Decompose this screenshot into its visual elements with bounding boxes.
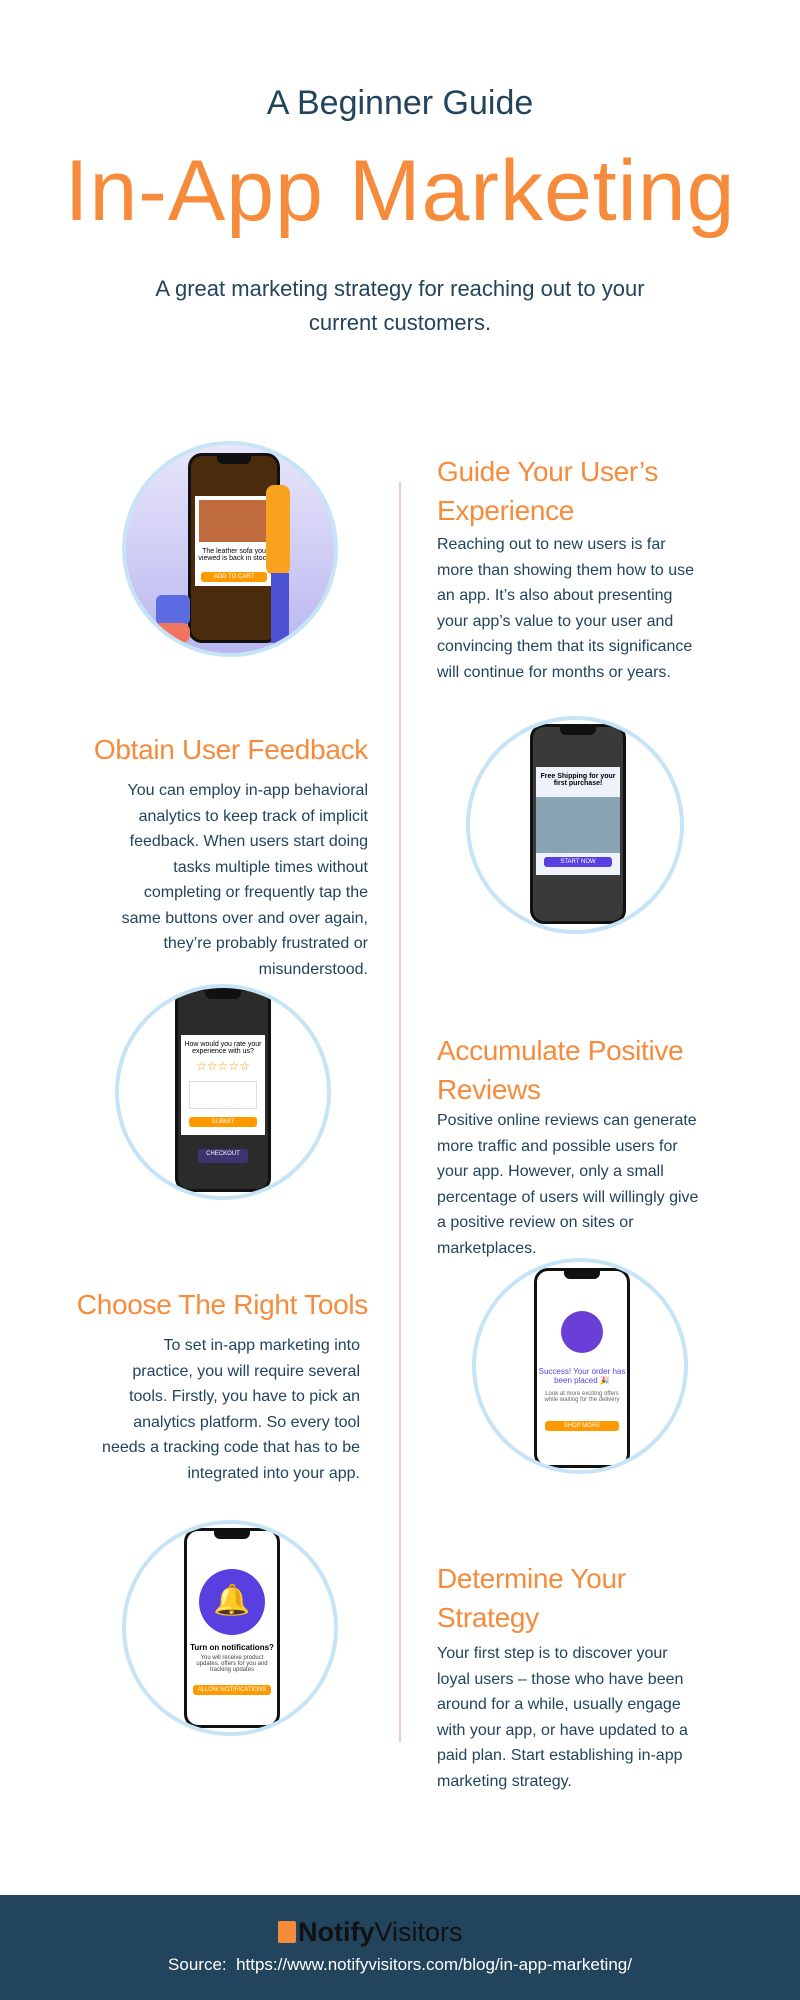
text: feedback: analytics to keep track of implicit: [139, 808, 368, 824]
text: tools: [102, 1337, 360, 1482]
icon: circle 3 rating phone: SUBMIT: [212, 1119, 234, 1125]
subtitle: current customers.: [309, 310, 491, 335]
text: feedback: they’re probably frustrated or: [163, 935, 368, 952]
icon: circle 5 notifications phone: Turn on notifications?: [190, 1643, 274, 1652]
text: feedback: same buttons over and over again,: [122, 910, 368, 926]
heading: Accumulate Positive Reviews: Accumulate Positive: [437, 1035, 683, 1066]
heading: Guide Your User's Experience: [437, 456, 658, 526]
icon: circle 2 free shipping phone: Free Shipping for your first purchase!: [540, 773, 616, 787]
source: Source: https://www.notifyvisitors.com/blog/in-app-marketing/: [168, 1955, 632, 1974]
text: feedback: [122, 782, 368, 978]
icon: circle 4 order placed phone: SHOP MORE: [564, 1423, 600, 1429]
text: strategy: [437, 1645, 688, 1790]
text: guide: [437, 536, 694, 680]
text: reviews: percentage of users will willingly give: [437, 1188, 698, 1206]
text: tools: To set in-app marketing into: [163, 1337, 360, 1354]
icon: circle 5 notifications phone: You will receive product updates, offers for you and tracking updates: [196, 1655, 268, 1673]
icon: circle 5 notifications phone: ALLOW NOTIFICATIONS: [198, 1687, 266, 1693]
subtitle: A great marketing strategy for reaching out to your: [155, 276, 645, 301]
text: strategy: Your first step is to discover your: [437, 1645, 668, 1662]
text: reviews: more traffic and possible users for: [437, 1138, 678, 1154]
icon: circle 4 order placed phone: Success! Your order has been placed 🎉: [539, 1367, 625, 1385]
logo: NotifyVisitors: [298, 1917, 463, 1947]
subtitle: [155, 276, 645, 335]
icon: circle 2 free shipping phone: START NOW: [560, 859, 596, 865]
icon: circle 3 rating phone: ☆☆☆☆☆: [196, 1059, 250, 1073]
icon: circle 4 order placed phone: [472, 1258, 688, 1474]
icon: circle 3 rating phone: CHECKOUT: [206, 1151, 240, 1157]
icon: circle 1 phone with people: [122, 441, 338, 657]
text: reviews: your app. However, only a small: [437, 1163, 664, 1180]
text: tools: integrated into your app.: [187, 1464, 360, 1482]
text: tools: needs a tracking code that has to be: [102, 1439, 360, 1456]
text: guide: will continue for months or years.: [437, 664, 671, 680]
icon: circle 3 rating phone: How would you rate your experience with us?: [184, 1041, 262, 1055]
heading: Determine Your Strategy: Strategy: [437, 1602, 539, 1633]
text: tools: practice, you will require several: [132, 1362, 360, 1380]
heading: Accumulate Positive Reviews: Reviews: [437, 1074, 541, 1105]
text: guide: an app. It’s also about presenting: [437, 587, 672, 604]
text: feedback: misunderstood.: [259, 960, 368, 978]
icon: circle 3 rating phone: [115, 984, 331, 1200]
text: strategy: with your app, or have updated to a: [437, 1722, 688, 1738]
divider line: [399, 482, 401, 1742]
heading: Guide Your User's Experience: Guide Your User’s: [437, 456, 658, 487]
text: guide: your app’s value to your user and: [437, 612, 673, 630]
text: tools: tools. Firstly, you have to pick an: [129, 1388, 360, 1405]
text: guide: more than showing them how to use: [437, 562, 694, 578]
heading: Choose The Right Tools: Choose The Right Tools: [77, 1289, 368, 1320]
text: strategy: loyal users – those who have been: [437, 1670, 683, 1688]
text: feedback: completing or frequently tap the: [144, 884, 368, 901]
heading: Guide Your User's Experience: Experience: [437, 495, 574, 526]
icon: circle 5 notifications phone: 🔔: [213, 1584, 251, 1617]
icon: circle 1 phone with people: The leather sofa you viewed is back in stock: [198, 548, 270, 562]
title: In-App Marketing: In-App Marketing: [65, 143, 735, 239]
icon: circle 4 order placed phone: Look at more exciting offers while waiting for the delivery: [544, 1391, 620, 1403]
icon: circle 1 phone with people: ADD TO CART: [214, 574, 254, 580]
icon: circle 5 notifications phone: [122, 1520, 338, 1736]
text: feedback: tasks multiple times without: [173, 858, 368, 876]
text: tools: analytics platform. So every tool: [133, 1414, 360, 1430]
heading: Accumulate Positive Reviews: [437, 1035, 683, 1105]
heading: Obtain User Feedback: Obtain User Feedback: [94, 734, 368, 765]
text: feedback: You can employ in-app behavioral: [128, 782, 368, 799]
text: reviews: [437, 1112, 698, 1256]
text: strategy: marketing strategy.: [437, 1772, 572, 1790]
icon: circle 2 free shipping phone: [466, 716, 684, 934]
text: guide: convincing them that its significance: [437, 638, 692, 655]
title: A Beginner Guide: A Beginner Guide: [267, 84, 533, 122]
text: feedback: feedback. When users start doing: [130, 833, 368, 850]
heading: Determine Your Strategy: Determine Your: [437, 1563, 626, 1594]
text: reviews: marketplaces.: [437, 1240, 537, 1256]
heading: Determine Your Strategy: [437, 1563, 626, 1633]
text: strategy: paid plan. Start establishing in-app: [437, 1747, 682, 1764]
text: guide: Reaching out to new users is far: [437, 536, 666, 553]
text: reviews: Positive online reviews can generate: [437, 1112, 697, 1129]
text: reviews: a positive review on sites or: [437, 1214, 634, 1231]
footer: [0, 1895, 800, 2000]
text: strategy: around for a while, usually engage: [437, 1696, 681, 1713]
